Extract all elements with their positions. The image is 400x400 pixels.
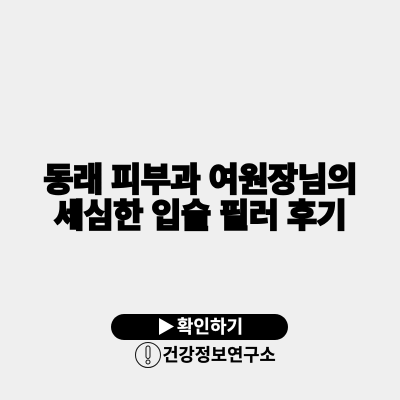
title	[43, 161, 357, 234]
icon: exclamation in circle	[135, 342, 161, 368]
icon: play triangle	[159, 318, 174, 335]
title: 동래 피부과 여원장님의	[43, 161, 357, 198]
button label: 확인하기	[177, 317, 243, 337]
button: confirm	[111, 314, 288, 340]
brand name: 건강정보연구소	[162, 345, 276, 365]
title: 세심한 입술 필러 후기	[54, 196, 346, 234]
